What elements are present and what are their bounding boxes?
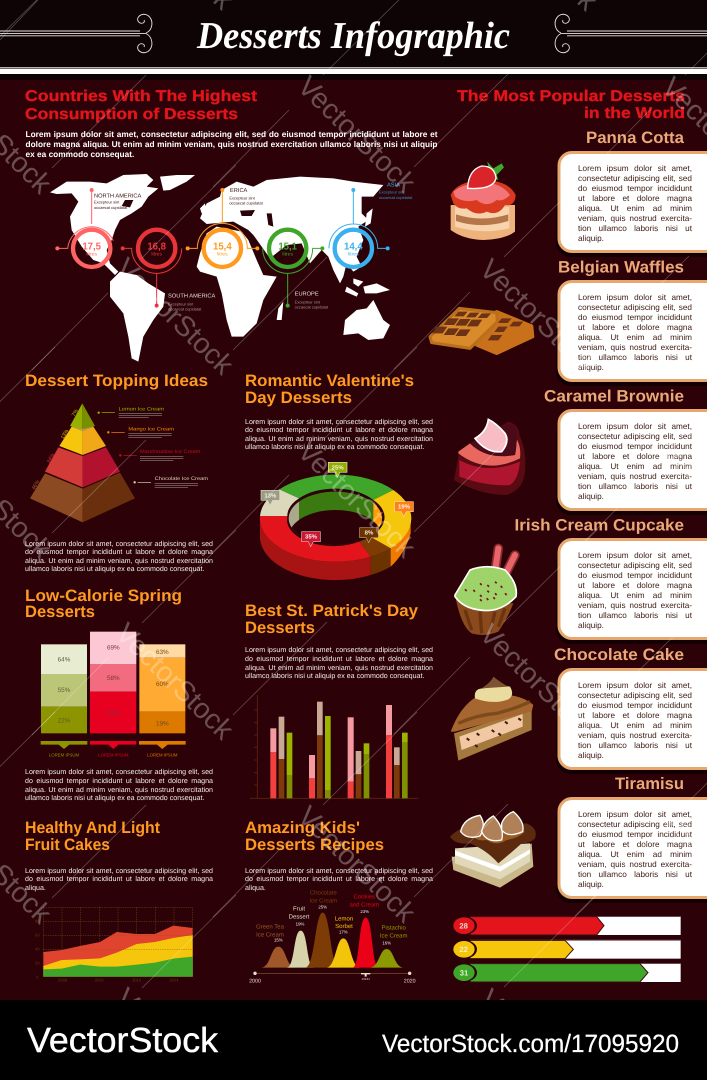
layer: lemon xyxy=(70,403,95,429)
pyramid labels: Mango Ice Cream xyxy=(128,426,174,432)
callout: 25%: 25% xyxy=(332,464,344,471)
heading: st patrick: Desserts xyxy=(245,619,315,637)
heading: low-calorie: Desserts xyxy=(25,603,95,621)
chart grid xyxy=(43,907,193,953)
timeline xyxy=(249,972,416,984)
watermark overlay: VectorStock xyxy=(473,253,604,383)
pyramid chart xyxy=(30,403,208,522)
pyramid labels: Chocolate Ice Cream xyxy=(155,476,208,481)
text: topping xyxy=(25,540,213,573)
bar: 31: 31 xyxy=(460,968,468,977)
group 2 xyxy=(309,702,331,798)
text: countries intro: Lorem ipsum dolor sit amet, consectetur adipiscing elit, sed do eiusmod tempor incididunt ut labore et xyxy=(26,129,438,139)
text: fruit cakes: do eiusmod tempor incididunt ut labore et dolore magna xyxy=(25,875,213,883)
text: chocolate cake card: Lorem ipsum dolor sit amet, xyxy=(578,681,692,690)
labels: Pistachio xyxy=(381,924,406,931)
text: countries intro: ex ea commodo consequat. xyxy=(26,149,134,159)
text: chocolate cake card: ut labore et dolore magna xyxy=(578,711,692,720)
text: fruit cakes: Lorem ipsum dolor sit amet, consectetur adipiscing elit, sed xyxy=(25,867,213,875)
text: panna cotta card: Lorem ipsum dolor sit amet, xyxy=(578,164,692,173)
text: tiramisu card: tion ullamco laboris nisi ut xyxy=(578,870,692,879)
text: st patrick: do eiusmod tempor incididunt ut labore et dolore magna xyxy=(245,655,433,663)
labels: 15% xyxy=(274,938,283,943)
ring: 17,5: litres xyxy=(86,251,97,257)
footer url: VectorStock.com/17095920 xyxy=(382,1030,679,1058)
label: europe: Excepteur sint xyxy=(295,300,320,304)
labels: Green Tea xyxy=(256,923,284,930)
callout: 8% xyxy=(360,528,378,543)
label: asia xyxy=(379,182,413,200)
labels: Ice Cream xyxy=(309,897,337,904)
text: fruit cakes: aliqua. xyxy=(25,884,46,892)
labels: Lemon xyxy=(335,915,353,922)
ring: 15,4 xyxy=(204,230,241,267)
label: africa: Excepteur sint xyxy=(229,196,255,200)
text: brownie card: aliquip. xyxy=(578,492,604,501)
heading: countries: Countries With The Highest xyxy=(25,88,257,105)
text: countries intro: dolore magna aliqua. Ut enim ad minim veniam, quis nostrud exercitation ullamco laboris nisi ut aliquip xyxy=(26,139,438,149)
bar: olive: 22% xyxy=(58,717,70,724)
heading: valentine: Day Desserts xyxy=(245,389,352,407)
text: spring: aliqua. Ut enim ad minim veniam, quis nostrud exercitation xyxy=(25,786,213,794)
pyramid percentages: 46% xyxy=(31,479,40,491)
bar: red: 58% xyxy=(107,675,120,682)
donut top faces xyxy=(260,475,411,562)
label: south america: SOUTH AMERICA xyxy=(168,293,216,299)
bar: orange: 19% xyxy=(156,720,169,727)
axis labels: 60 xyxy=(35,933,40,938)
panel: chocolate cake xyxy=(451,646,707,774)
heading: most popular desserts: in the World xyxy=(584,105,685,122)
timeline: 13134 xyxy=(361,977,370,981)
text: chocolate cake card: tion ullamco laboris nisi ut xyxy=(578,741,692,750)
text: cupcake card: aliquip. xyxy=(578,621,604,630)
icon: cupcake xyxy=(455,548,516,635)
heading: fruit cakes: Fruit Cakes xyxy=(25,836,110,854)
bar: 22 xyxy=(453,940,681,959)
card xyxy=(556,152,707,257)
label: africa xyxy=(229,187,263,205)
ring: 15,4: litres xyxy=(217,251,228,257)
text: chocolate cake card: consectetur adipiscing elit, sed xyxy=(578,691,692,700)
ring: 16,8 xyxy=(138,230,175,267)
flourish left xyxy=(0,14,152,53)
pyramid percentages: 13% xyxy=(60,428,69,440)
text: kids xyxy=(245,867,433,892)
text: st patrick: aliqua. Ut enim ad minim veniam, quis nostrud exercitation xyxy=(245,664,433,672)
watermark overlay: VectorStock xyxy=(291,70,422,200)
labels: Cookies xyxy=(353,893,375,900)
labels: Ice Cream xyxy=(380,932,408,939)
heading: kids recipes xyxy=(245,819,384,854)
heading: Panna Cotta xyxy=(586,129,685,147)
label: south america: occaecat cupidatat xyxy=(168,307,202,312)
red area xyxy=(43,926,193,977)
icon: brownie xyxy=(454,419,525,495)
callout: 19% xyxy=(395,502,413,517)
ring: 15,1 xyxy=(269,230,306,267)
bar: red: 69% xyxy=(107,644,120,651)
pyramid percentages: 7% xyxy=(71,408,79,417)
label: asia: Excepteur sint xyxy=(379,190,405,195)
group 1 xyxy=(270,717,292,798)
labels xyxy=(256,889,408,945)
label: asia: ASIA xyxy=(387,182,400,188)
callout: 8%: 8% xyxy=(365,529,373,536)
yellow area xyxy=(43,935,193,977)
text: tiramisu card: Lorem ipsum dolor sit amet, xyxy=(578,810,692,819)
text: panna cotta card xyxy=(578,164,692,243)
card xyxy=(556,410,707,515)
text: spring xyxy=(25,768,213,802)
labels: Fruit xyxy=(293,905,305,912)
watermark overlay: VectorStock xyxy=(473,618,604,748)
text: panna cotta card: tion ullamco laboris nisi ut xyxy=(578,224,692,233)
green area xyxy=(43,957,193,977)
text: chocolate cake card xyxy=(578,681,692,760)
heading: valentine: Romantic Valentine's xyxy=(245,372,414,390)
text: cupcake card: consectetur adipiscing elit, sed xyxy=(578,561,692,570)
text: kids: Lorem ipsum dolor sit amet, consectetur adipiscing elit, sed xyxy=(245,867,433,875)
card xyxy=(556,540,707,644)
callout: 35% xyxy=(302,532,320,547)
text: brownie card: do eiusmod tempor incididunt xyxy=(578,442,692,451)
text: waffles card: veniam, quis nostrud exercita- xyxy=(578,343,692,352)
bar: 28 xyxy=(453,916,681,935)
bar: red xyxy=(90,632,136,758)
bar: orange xyxy=(139,644,186,758)
labels: Chocolate xyxy=(310,889,337,896)
label: africa: ERICA xyxy=(230,187,248,193)
labels: Ice Cream xyxy=(256,931,284,938)
text: panna cotta card: do eiusmod tempor incididunt xyxy=(578,184,692,193)
ring: 15,1: litres xyxy=(282,251,293,257)
callout: 25% xyxy=(328,462,347,477)
axis labels xyxy=(35,919,179,983)
title: Desserts Infographic xyxy=(196,15,510,57)
text: tiramisu card: veniam, quis nostrud exercita- xyxy=(578,860,692,869)
pyramid labels: Lemon Ice Cream xyxy=(119,406,164,412)
axis labels: 2012 xyxy=(132,978,141,983)
text: brownie card: Lorem ipsum dolor sit amet, xyxy=(578,422,692,431)
text: topping: aliqua. Ut enim ad minim veniam, quis nostrud exercitation xyxy=(25,557,213,565)
text: waffles card: do eiusmod tempor incididunt xyxy=(578,313,692,322)
heading: Chocolate Cake xyxy=(554,646,684,664)
footer band xyxy=(0,1000,707,1080)
text: brownie card xyxy=(578,422,692,501)
stacked bar chart xyxy=(41,632,186,758)
text: tiramisu card xyxy=(578,810,692,889)
world map xyxy=(50,174,413,362)
header band xyxy=(0,0,707,80)
text: panna cotta card: ut labore et dolore magna xyxy=(578,194,692,203)
labels: Dessert xyxy=(289,913,309,920)
text: cupcake card: tion ullamco laboris nisi ut xyxy=(578,611,692,620)
text: chocolate cake card: aliqua. Ut enim ad minim xyxy=(578,721,692,730)
text: cupcake card: veniam, quis nostrud exercita- xyxy=(578,601,692,610)
text: tiramisu card: consectetur adipiscing elit, sed xyxy=(578,820,692,829)
label: north america xyxy=(94,192,142,210)
heading: st patrick xyxy=(245,602,419,637)
text: cupcake card: Lorem ipsum dolor sit amet, xyxy=(578,551,692,560)
group 3 xyxy=(348,717,369,798)
text: tiramisu card: do eiusmod tempor incididunt xyxy=(578,830,692,839)
heading: kids recipes: Desserts Recipes xyxy=(245,836,384,854)
text: waffles card: tion ullamco laboris nisi ut xyxy=(578,353,692,362)
watermark overlay: VectorStock xyxy=(291,435,422,565)
panel: belgian waffles xyxy=(430,259,707,386)
heading: Caramel Brownie xyxy=(544,388,684,406)
heading: dessert topping: Dessert Topping Ideas xyxy=(25,372,208,390)
heading: Belgian Waffles xyxy=(558,259,684,277)
labels: Sorbet xyxy=(335,923,353,929)
labels: 25% xyxy=(318,905,327,910)
heading: fruit cakes: Healthy And Light xyxy=(25,819,160,837)
heading: countries xyxy=(25,88,257,123)
text: panna cotta card: aliquip. xyxy=(578,234,604,243)
labels: 23% xyxy=(360,909,369,914)
panel: caramel brownie xyxy=(454,388,707,515)
text: kids: aliqua. xyxy=(245,884,266,892)
watermark overlay: VectorStock xyxy=(109,252,240,382)
heading: st patrick: Best St. Patrick's Day xyxy=(245,602,419,620)
text: panna cotta card: aliqua. Ut enim ad minim xyxy=(578,204,692,213)
area chart xyxy=(35,907,193,983)
labels: 17% xyxy=(339,930,348,935)
axis labels: 2008 xyxy=(58,978,67,983)
timeline: 2020 xyxy=(404,978,416,984)
axis labels: 40 xyxy=(35,947,40,952)
connector lines xyxy=(57,190,388,306)
curves xyxy=(261,913,404,968)
heading: most popular desserts xyxy=(457,88,685,122)
icon: waffles xyxy=(430,308,533,353)
progress bars xyxy=(453,916,681,982)
text: topping: ullamco laboris nisi ut aliquip ex ea commodo consequat. xyxy=(25,565,204,573)
axis labels: 80 xyxy=(35,919,40,924)
heading: fruit cakes xyxy=(25,819,160,854)
axis labels: 0 xyxy=(36,975,39,979)
grouped bar chart xyxy=(250,695,418,798)
bar: olive: LOREM IPSUM xyxy=(49,753,79,758)
callout: 13% xyxy=(261,490,280,505)
callout: 19%: 19% xyxy=(398,503,410,510)
timeline: 2000 xyxy=(249,978,261,984)
pyramid percentages xyxy=(31,408,79,491)
label: north america: Excepteur sint xyxy=(94,200,120,205)
panel: tiramisu xyxy=(450,775,707,903)
text: cupcake card: ut labore et dolore magna xyxy=(578,581,692,590)
donut sides xyxy=(260,516,411,580)
layer: chocolate xyxy=(30,473,135,522)
group 4 xyxy=(386,705,408,798)
text: topping: do eiusmod tempor incididunt ut labore et dolore magna xyxy=(25,548,213,556)
panel: irish cream cupcake xyxy=(455,517,707,644)
bell curve chart xyxy=(249,889,416,984)
icon: panna cotta xyxy=(451,162,516,240)
ring: 16,8: litres xyxy=(151,251,162,257)
labels: 16% xyxy=(382,940,391,945)
text: waffles card: consectetur adipiscing elit, sed xyxy=(578,303,692,312)
callout: 13%: 13% xyxy=(264,492,276,499)
text: cupcake card xyxy=(578,551,692,630)
bar: orange: 60% xyxy=(156,681,169,688)
axis labels: 2014 xyxy=(170,978,179,983)
icon: tiramisu xyxy=(450,812,536,888)
ring: 15,1: 15,1 xyxy=(278,241,297,252)
text: brownie card: veniam, quis nostrud exercita- xyxy=(578,472,692,481)
label: europe: occaecat cupidatat xyxy=(295,305,328,310)
label: north america: occaecat cupidatat xyxy=(94,205,128,210)
bar: 31 xyxy=(453,963,681,982)
bar: orange: 63% xyxy=(156,649,169,656)
heading: Tiramisu xyxy=(615,775,684,793)
label: south america xyxy=(168,293,216,312)
text: valentine: ullamco laboris nisi ut aliquip ex ea commodo consequat. xyxy=(245,443,424,451)
bar: 28: 28 xyxy=(459,921,468,930)
bar: red: 47% xyxy=(107,710,120,717)
card xyxy=(556,798,707,903)
heading: low-calorie xyxy=(25,587,182,621)
label: europe xyxy=(295,290,328,310)
icon: chocolate cake xyxy=(451,677,533,761)
text: tiramisu card: aliquip. xyxy=(578,880,604,889)
text: cupcake card: aliqua. Ut enim ad minim xyxy=(578,591,692,600)
text: kids: do eiusmod tempor incididunt ut labore et dolore magna xyxy=(245,875,433,883)
bar: olive: 55% xyxy=(58,687,70,694)
text: chocolate cake card: do eiusmod tempor incididunt xyxy=(578,701,692,710)
text: fruit cakes xyxy=(25,867,213,892)
text: brownie card: tion ullamco laboris nisi ut xyxy=(578,482,692,491)
heading: kids recipes: Amazing Kids' xyxy=(245,819,360,837)
heading: Irish Cream Cupcake xyxy=(514,517,684,535)
text: tiramisu card: ut labore et dolore magna xyxy=(578,840,692,849)
text: st patrick: ullamco laboris nisi ut aliquip ex ea commodo consequat. xyxy=(245,672,424,680)
text: waffles card: ut labore et dolore magna xyxy=(578,323,692,332)
ring: 14,4: litres xyxy=(348,251,359,257)
text: waffles card: aliqua. Ut enim ad minim xyxy=(578,333,692,342)
continents xyxy=(50,174,390,362)
text: countries intro xyxy=(26,129,438,159)
text: st patrick: Lorem ipsum dolor sit amet, consectetur adipiscing elit, sed xyxy=(245,646,433,654)
panel: panna cotta xyxy=(451,129,707,257)
label: north america: NORTH AMERICA xyxy=(94,192,142,199)
callout: 35%: 35% xyxy=(305,533,317,540)
heading: most popular desserts: The Most Popular Desserts xyxy=(457,88,685,105)
footer logo: VectorStock xyxy=(27,1021,219,1060)
ring: 17,5: 17,5 xyxy=(82,241,101,252)
bar: orange: LOREM IPSUM xyxy=(147,753,178,758)
text: brownie card: aliqua. Ut enim ad minim xyxy=(578,462,692,471)
bar: red: LOREM IPSUM xyxy=(98,753,129,758)
heading: countries: Consumption of Desserts xyxy=(25,106,238,123)
label: asia: occaecat cupidatat xyxy=(379,195,413,200)
connector dots xyxy=(55,188,390,308)
text: valentine: aliqua. Ut enim ad minim veniam, quis nostrud exercitation xyxy=(245,435,433,443)
card xyxy=(556,282,707,386)
donut hole walls xyxy=(288,492,382,545)
axis labels: 20 xyxy=(35,961,40,966)
heading: valentine xyxy=(245,372,414,407)
text: panna cotta card: veniam, quis nostrud exercita- xyxy=(578,214,692,223)
text: spring: Lorem ipsum dolor sit amet, consectetur adipiscing elit, sed xyxy=(25,768,213,776)
pyramid labels: Marshmallow Ice Cream xyxy=(140,449,200,454)
axes xyxy=(250,695,418,798)
text: valentine xyxy=(245,418,433,451)
ring: 14,4 xyxy=(335,230,372,267)
text: brownie card: ut labore et dolore magna xyxy=(578,452,692,461)
text: tiramisu card: aliqua. Ut enim ad minim xyxy=(578,850,692,859)
watermark overlay: VectorStock xyxy=(109,617,240,747)
text: chocolate cake card: veniam, quis nostrud exercita- xyxy=(578,731,692,740)
layer: mango xyxy=(59,425,106,455)
ring: 16,8: 16,8 xyxy=(147,241,166,252)
text: valentine: do eiusmod tempor incididunt ut labore et dolore magna xyxy=(245,426,433,434)
ring: 17,5 xyxy=(73,230,110,267)
bar: olive xyxy=(41,644,87,758)
card xyxy=(556,670,707,774)
bar: 22: 22 xyxy=(459,945,468,954)
axis labels: 2010 xyxy=(95,978,104,983)
labels: 19% xyxy=(296,922,304,927)
text: st patrick xyxy=(245,646,433,680)
text: valentine: Lorem ipsum dolor sit amet, consectetur adipiscing elit, sed xyxy=(245,418,433,426)
label: africa: occaecat cupidatat xyxy=(229,201,263,205)
text: panna cotta card: consectetur adipiscing elit, sed xyxy=(578,174,692,183)
text: cupcake card: do eiusmod tempor incididunt xyxy=(578,571,692,580)
ring: 15,4: 15,4 xyxy=(213,241,232,252)
pyramid percentages: 34% xyxy=(46,452,55,464)
labels: and Cream xyxy=(349,901,379,908)
text: waffles card: Lorem ipsum dolor sit amet, xyxy=(578,293,692,302)
watermark overlay: VectorStock xyxy=(291,800,422,930)
pyramid labels xyxy=(97,406,208,488)
layer: marshmallow xyxy=(45,447,120,487)
label: south america: Excepteur sint xyxy=(168,302,194,306)
text: spring: do eiusmod tempor incididunt ut labore et dolore magna xyxy=(25,777,213,785)
text: waffles card: aliquip. xyxy=(578,363,604,372)
text: topping: Lorem ipsum dolor sit amet, consectetur adipiscing elit, sed xyxy=(25,540,213,548)
donut chart xyxy=(260,462,413,580)
text: brownie card: consectetur adipiscing elit, sed xyxy=(578,432,692,441)
text: chocolate cake card: aliquip. xyxy=(578,751,604,760)
ring: 14,4: 14,4 xyxy=(344,241,363,252)
flourish right xyxy=(555,14,707,53)
label: europe: EUROPE xyxy=(295,290,319,297)
text: spring: ullamco laboris nisi ut aliquip ex ea commodo consequat. xyxy=(25,794,204,802)
heading: low-calorie: Low-Calorie Spring xyxy=(25,587,182,605)
text: waffles card xyxy=(578,293,692,372)
bar: olive: 64% xyxy=(58,656,70,663)
